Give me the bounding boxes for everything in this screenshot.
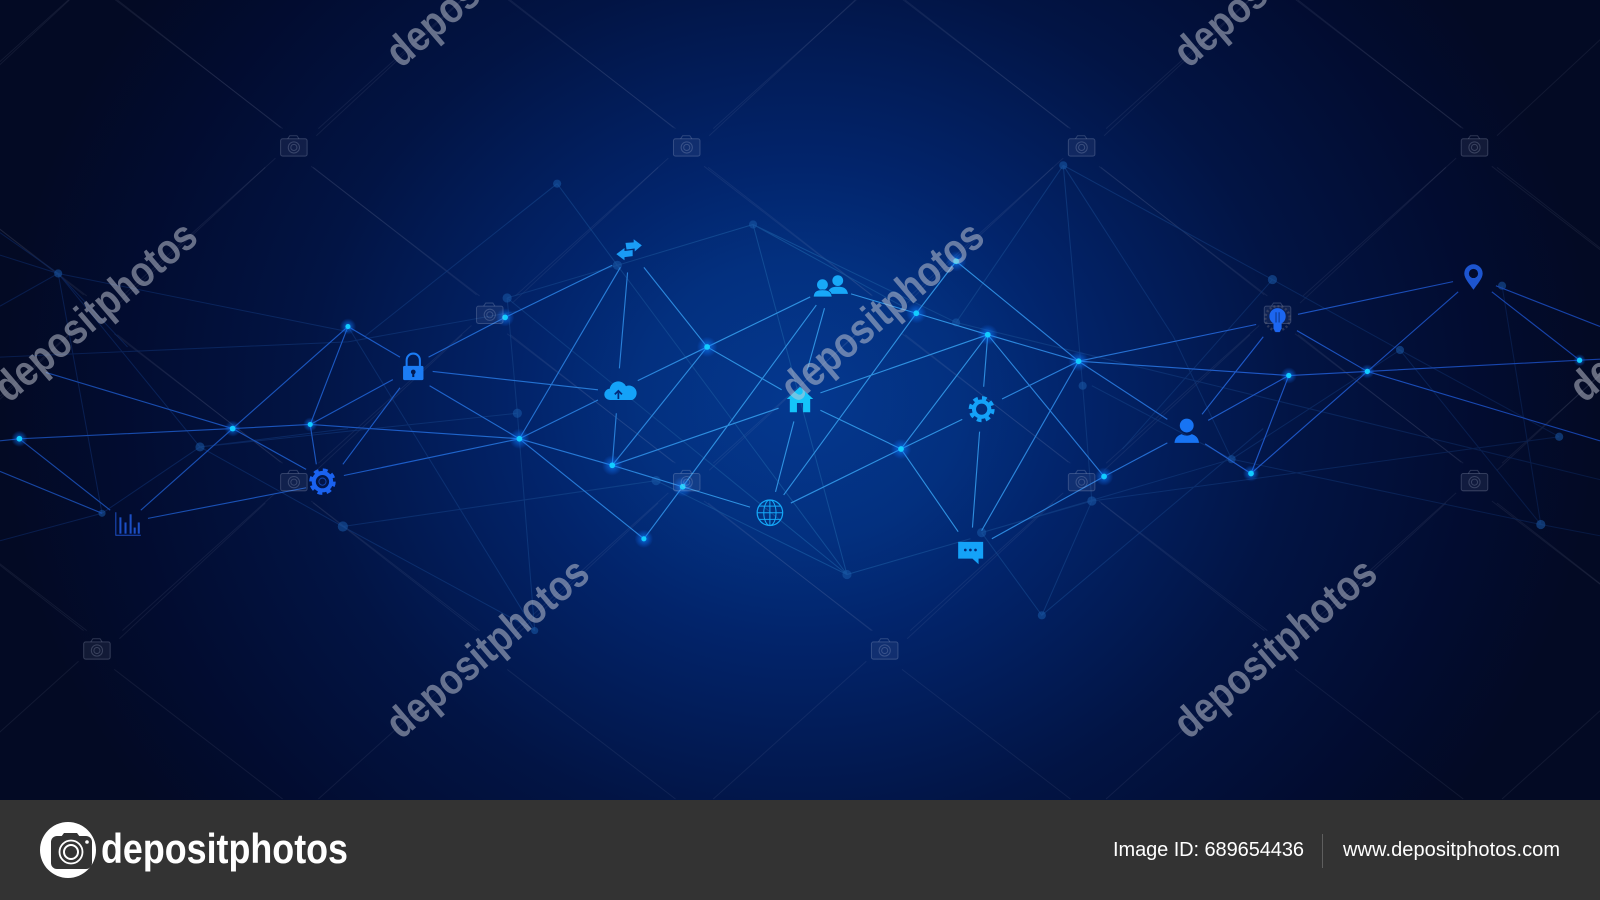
icon: light bulb <box>1265 306 1290 332</box>
footer divider <box>1322 834 1323 868</box>
icon: bar chart <box>115 512 141 536</box>
watermark text: depositphotos <box>771 212 993 411</box>
image id: Image ID: 689654436 <box>1113 839 1304 861</box>
watermark text: depositphotos <box>1164 548 1386 748</box>
bright glowing nodes <box>11 251 1586 548</box>
icon: home <box>787 387 813 412</box>
icon: globe <box>757 500 783 526</box>
watermark text: depositphotos <box>376 548 598 748</box>
icon: transfer arrows <box>616 239 642 260</box>
icon: gear right <box>970 398 993 420</box>
footer logo wordmark: depositphotos <box>101 825 348 872</box>
website url: www.depositphotos.com <box>1342 839 1560 861</box>
icon: people <box>813 275 848 297</box>
icon: gear left <box>311 470 334 493</box>
dim network nodes <box>54 161 1563 634</box>
footer logo: camera in circle <box>40 822 96 878</box>
icon: person <box>1174 419 1199 443</box>
icon: chat bubble <box>958 542 983 564</box>
icon: cloud upload <box>604 381 637 400</box>
icon: map pin <box>1464 264 1483 290</box>
dim background network lines <box>0 165 1600 631</box>
watermark cameras <box>84 136 1488 659</box>
bright network lines <box>0 261 1600 539</box>
footer bar <box>0 800 1600 900</box>
icon: padlock <box>403 354 423 380</box>
